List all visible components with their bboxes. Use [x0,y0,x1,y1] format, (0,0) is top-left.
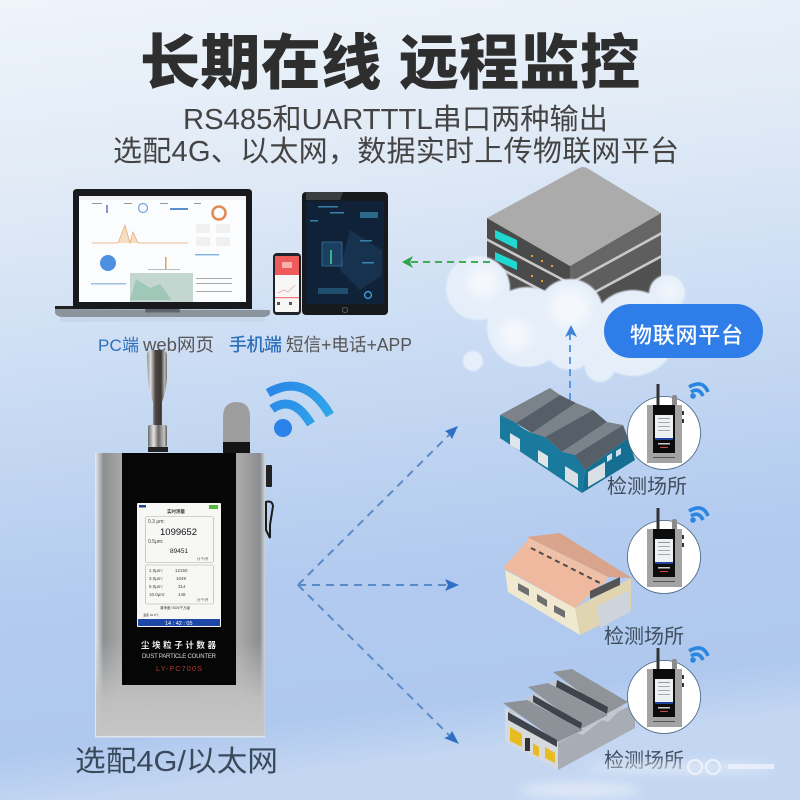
arrow to lower site [298,585,459,744]
arrow to middle site [298,579,459,591]
reading count 1099652: 1099652 [160,527,197,538]
PC label: PC端 [98,336,139,355]
distribution arrows [298,426,459,744]
screen heading: 实时测量 [167,508,185,515]
wifi icon [268,386,330,437]
small particle readings: 12150 [175,568,188,573]
title: 长期在线 远程监控 [140,30,640,97]
site 1 label: 检测场所 [607,475,687,498]
small particle readings: 10.0μm: [149,592,165,597]
device body [95,453,265,737]
subtitle: serial output: RS485和UARTTTL串口两种输出 [183,103,608,136]
arrow: server to terminals [402,256,490,268]
small particle readings: 3.0μm: [149,576,163,581]
arrow to upper site [298,426,458,585]
platform badge [604,304,763,358]
site 3: grey factory [503,669,635,770]
subtitle: optional networking: 选配4G、以太网，数据实时上传物联网平台 [113,135,679,168]
laptop dashboard [79,196,246,302]
small particle readings: 1.0μm: [149,568,163,573]
site 1 device badge [628,384,708,470]
unit upper: 计个/升 [197,556,209,561]
time bar: 14 : 42 : 05 [165,621,193,627]
arrow: sites to cloud [565,325,577,400]
web page label: web网页 [142,335,214,355]
site 2 device badge [628,508,708,594]
server stack [487,167,661,340]
tablet [302,192,388,315]
device caption: 选配4G/以太网 [75,745,278,778]
device english name: DUST PARTICLE COUNTER [142,654,217,660]
small particle readings: 1049 [176,576,187,581]
status line: 清净度 ISO6千万级 [160,605,190,610]
site 2: tan factory [503,533,632,635]
unit lower: 计个/升 [197,597,209,602]
watermark smudge [520,760,775,798]
platform label: 物联网平台 [630,323,743,348]
site 2 label: 检测场所 [604,625,684,648]
site 3 device badge [628,648,708,734]
reading 0.5 um: 0.5μm: [148,539,163,545]
humidity sensor [223,402,250,442]
intake probe [147,350,167,425]
reading count 89451: 89451 [170,548,188,555]
phone [273,253,301,315]
small particle readings: 148 [178,592,186,597]
particle counter device [95,350,273,738]
device chinese name: 尘埃粒子计数器 [141,640,216,650]
device screen [137,503,221,627]
cloud [446,256,685,382]
access caption [98,335,412,355]
site 3 label: 检测场所 [604,749,684,772]
status light: upper [495,230,517,249]
mobile label: 手机端 [229,335,282,355]
SMS, phone and app label: 短信+电话+APP [286,335,412,355]
environment readings: 温度 20.0℃ [143,612,159,617]
small particle readings [149,568,188,597]
status light: lower [495,252,517,270]
laptop [55,189,270,322]
small particle readings: 5.0μm: [149,584,163,589]
site 1: blue factory [500,388,635,493]
small particle readings: 314 [178,584,186,589]
reading 0.3 um: 0.3 μm: [148,519,165,525]
device model: LY-PC700S [156,664,202,673]
